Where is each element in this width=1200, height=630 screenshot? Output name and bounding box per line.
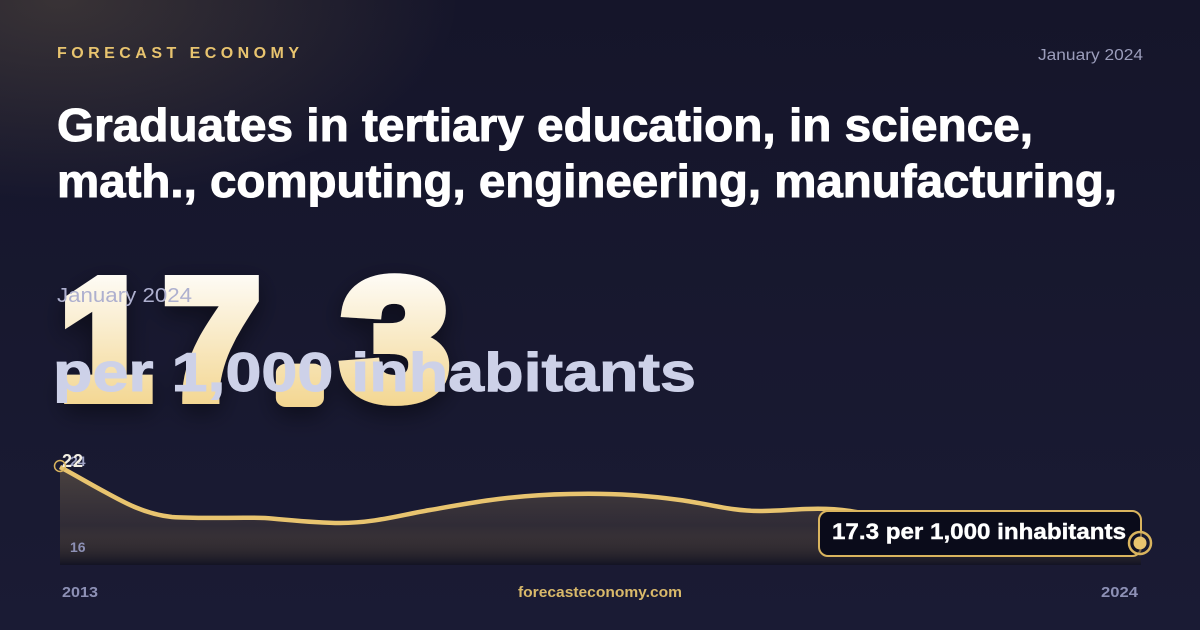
trend line: [60, 467, 1140, 543]
x axis end year: 2024: [1101, 584, 1139, 601]
title: [57, 99, 1117, 207]
callout: [819, 511, 1141, 556]
big value: 7: [164, 244, 260, 434]
title: Graduates in tertiary education, in science,: [57, 99, 1033, 151]
y axis min label: 16: [70, 539, 86, 555]
end marker: [1129, 532, 1151, 554]
callout: 17.3 per 1,000 inhabitants: [832, 519, 1126, 544]
y axis max labels: 24: [70, 453, 86, 469]
title: math., computing, engineering, manufacturing,: [57, 155, 1117, 207]
x axis start year: 2013: [62, 584, 98, 601]
date overlay: January 2024: [57, 285, 192, 307]
big value: 3: [342, 244, 449, 434]
chart area fill: [60, 467, 1141, 565]
start marker: [54, 460, 66, 472]
date top right: January 2024: [1038, 47, 1143, 64]
unit label: per 1,000 inhabitants: [53, 341, 696, 403]
y axis max labels: 22: [62, 451, 83, 471]
big value: [60, 244, 449, 435]
brand label: FORECAST ECONOMY: [57, 45, 299, 62]
area chart: [54, 451, 1141, 565]
source: forecasteconomy.com: [518, 584, 682, 601]
big value: .: [273, 245, 327, 435]
big value: 1: [60, 244, 151, 434]
